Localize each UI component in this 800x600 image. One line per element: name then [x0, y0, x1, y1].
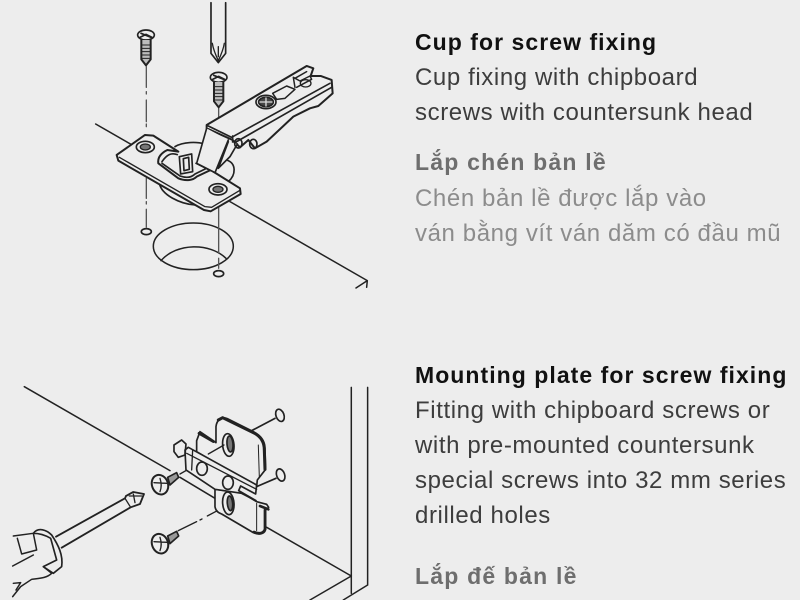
panel edge line — [96, 124, 367, 288]
text: mounting plate description: special screws into 32 mm series — [415, 467, 786, 494]
heading: mounting plate for screw fixing: Mounting plate for screw fixing — [415, 362, 787, 388]
countersink hole — [141, 223, 233, 277]
text: cup fixing description: screws with countersunk head — [415, 99, 753, 126]
illustration: mounting plate screw fixing — [13, 387, 368, 600]
mounting wing plate — [117, 135, 241, 211]
left screw — [138, 30, 154, 65]
centre screw — [210, 72, 227, 107]
upper plate — [197, 418, 266, 487]
text: Vietnamese cup description: ván bằng vít ván dăm có đầu mũ — [415, 220, 781, 247]
heading: Vietnamese cup fixing: Lắp chén bản lề — [415, 149, 607, 175]
text: cup fixing description — [415, 64, 753, 126]
hinge arm — [197, 66, 333, 173]
middle strip — [185, 447, 257, 501]
text: Vietnamese cup description: Chén bản lề được lắp vào — [415, 185, 707, 212]
heading: cup for screw fixing: Cup for screw fixing — [415, 29, 657, 55]
heading: Vietnamese mounting plate: Lắp đế bản lề — [415, 563, 578, 589]
text: mounting plate description: drilled holes — [415, 502, 551, 529]
hinge cup — [159, 142, 234, 205]
text: Vietnamese cup description — [415, 184, 781, 247]
lower tab — [215, 489, 269, 534]
upper screw — [149, 473, 179, 497]
text: mounting plate description: Fitting with chipboard screws or — [415, 397, 770, 424]
mounting plate — [174, 418, 269, 534]
illustration: cup hinge screw fixing — [96, 3, 367, 288]
screwdriver and hand — [13, 492, 144, 597]
axis lines — [146, 67, 219, 268]
cabinet edges — [24, 387, 368, 600]
screwdriver tip — [211, 3, 226, 63]
lower screw — [149, 531, 179, 556]
text: mounting plate description: with pre-mounted countersunk — [415, 432, 755, 459]
text: cup fixing description: Cup fixing with chipboard — [415, 64, 698, 91]
drill marks and axes — [178, 408, 287, 531]
text: mounting plate description — [415, 397, 786, 529]
